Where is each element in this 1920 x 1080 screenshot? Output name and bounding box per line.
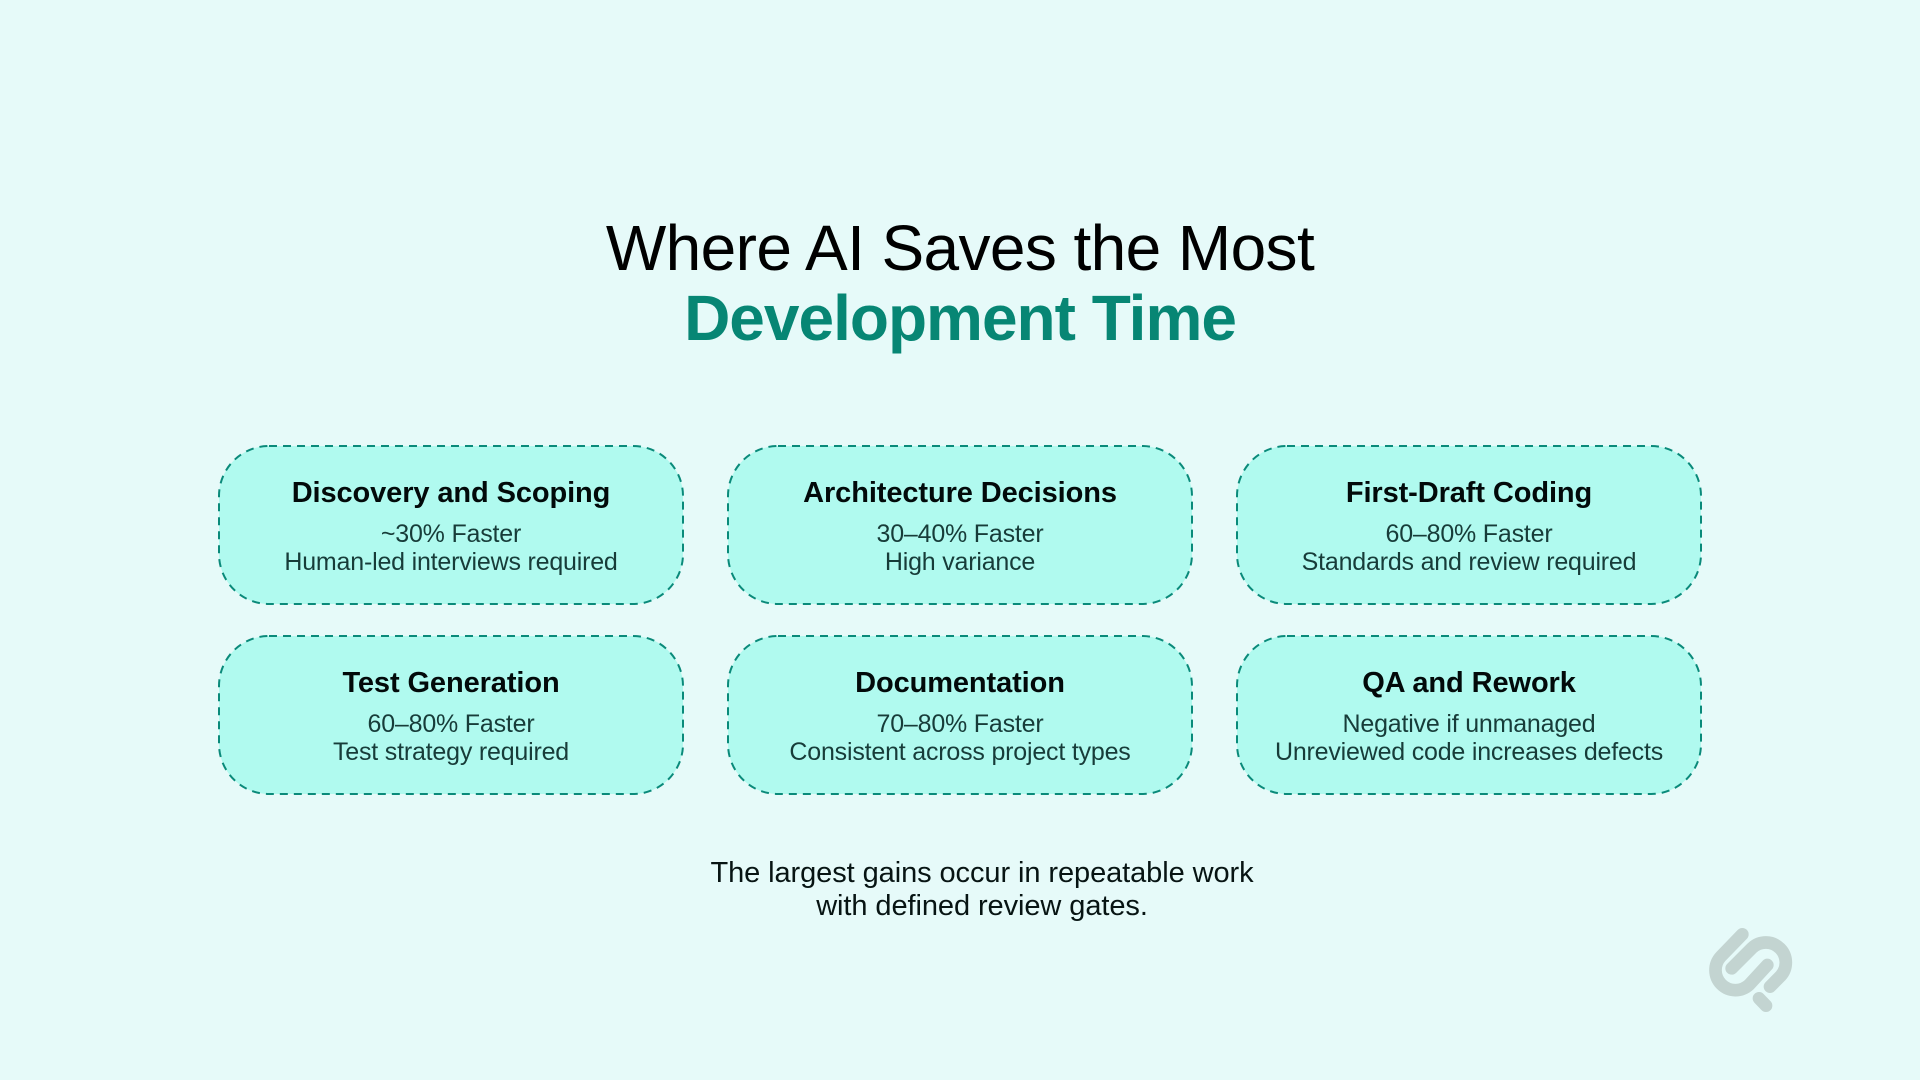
text bbox=[1302, 520, 1636, 576]
text bbox=[333, 710, 569, 766]
text: 60–80% Faster bbox=[368, 710, 534, 738]
panel: architecture decisions bbox=[727, 445, 1193, 605]
panel: discovery and scoping bbox=[218, 445, 684, 605]
text bbox=[877, 520, 1044, 576]
title bbox=[606, 212, 1314, 354]
heading: Discovery and Scoping bbox=[292, 477, 610, 509]
footer note: with defined review gates. bbox=[816, 890, 1148, 922]
text: Unreviewed code increases defects bbox=[1275, 738, 1663, 766]
panel: documentation bbox=[727, 635, 1193, 795]
heading: Test Generation bbox=[342, 667, 560, 699]
title: Development Time bbox=[684, 282, 1236, 354]
title: Where AI Saves the Most bbox=[606, 212, 1314, 284]
text: Test strategy required bbox=[333, 738, 569, 766]
text bbox=[284, 520, 618, 576]
footer note bbox=[710, 857, 1254, 922]
text: Negative if unmanaged bbox=[1343, 710, 1595, 738]
text: Standards and review required bbox=[1302, 548, 1636, 576]
heading: Architecture Decisions bbox=[803, 477, 1117, 509]
text: 60–80% Faster bbox=[1386, 520, 1552, 548]
text bbox=[789, 710, 1131, 766]
text: Consistent across project types bbox=[789, 738, 1131, 766]
text bbox=[1275, 710, 1663, 766]
icon: logo bbox=[1709, 928, 1792, 1012]
panel: test generation bbox=[218, 635, 684, 795]
heading: First-Draft Coding bbox=[1346, 477, 1592, 509]
footer note: The largest gains occur in repeatable work bbox=[710, 857, 1254, 889]
text: ~30% Faster bbox=[381, 520, 521, 548]
text: High variance bbox=[885, 548, 1035, 576]
heading: Documentation bbox=[855, 667, 1065, 699]
panel: first-draft coding bbox=[1236, 445, 1702, 605]
panel: qa and rework bbox=[1236, 635, 1702, 795]
text: Human-led interviews required bbox=[284, 548, 618, 576]
text: 30–40% Faster bbox=[877, 520, 1043, 548]
text: 70–80% Faster bbox=[877, 710, 1043, 738]
heading: QA and Rework bbox=[1362, 667, 1576, 699]
